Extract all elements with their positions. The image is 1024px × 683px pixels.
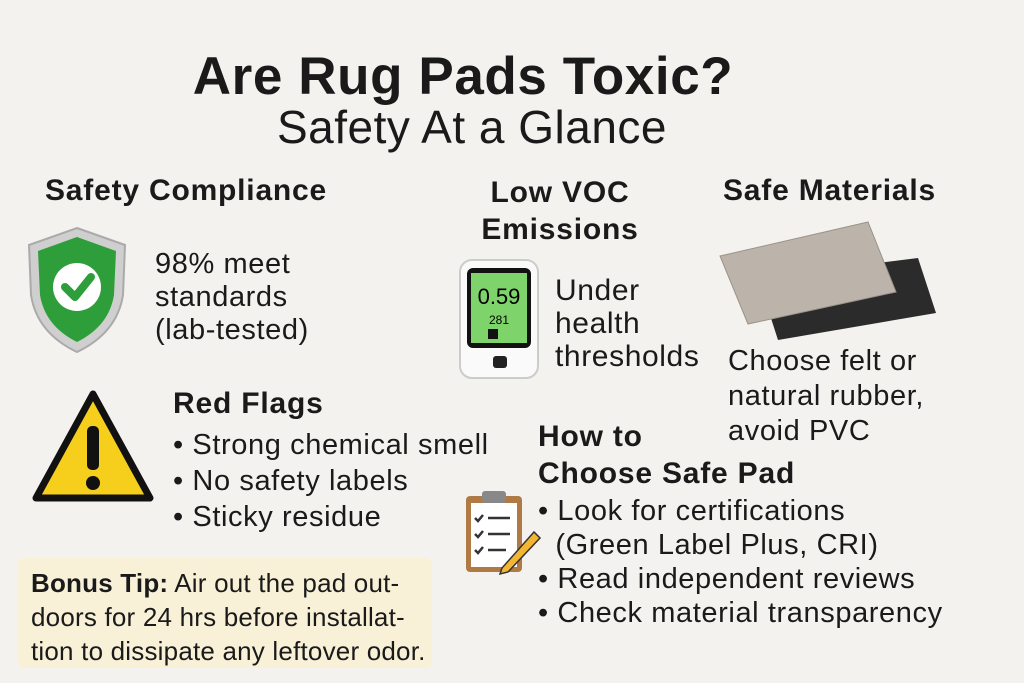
- text: under health thresholds: [555, 274, 699, 373]
- icon: VOC meter: 0.59: [478, 284, 520, 309]
- panel: safe materials: [719, 174, 936, 447]
- title: Are Rug Pads Toxic?: [193, 47, 733, 106]
- panel: safety compliance: [28, 174, 327, 353]
- icon: VOC meter: [459, 259, 539, 379]
- callout: bonus tip: [18, 558, 432, 668]
- text: under health thresholds: Under: [555, 274, 640, 307]
- text: 98% meet standards: (lab-tested): [155, 314, 309, 346]
- panel: red flags: [32, 387, 489, 533]
- callout: bonus tip: Bonus Tip: Air out the pad out-: [31, 568, 399, 598]
- text: choose felt: [728, 345, 924, 447]
- heading: low VOC: Emissions: [481, 213, 639, 246]
- heading: how to choose: Choose Safe Pad: [538, 457, 795, 490]
- text: choose felt: Choose felt or: [728, 345, 917, 377]
- text: under health thresholds: thresholds: [555, 340, 699, 373]
- icon: warning triangle: [32, 390, 154, 502]
- list: red flags: • No safety labels: [173, 465, 408, 497]
- subtitle: Safety At a Glance: [277, 101, 667, 153]
- heading: low VOC: [481, 176, 639, 246]
- list: red flags: [173, 429, 489, 533]
- heading: safe materials: Safe Materials: [723, 174, 936, 207]
- callout: bonus tip: doors for 24 hrs before installat-: [31, 602, 405, 632]
- list: red flags: • Sticky residue: [173, 501, 381, 533]
- panel: low VOC: [459, 176, 699, 379]
- icon: clipboard: [466, 491, 541, 575]
- list: how to choose: (Green Label Plus, CRI): [555, 529, 879, 561]
- text: choose felt: natural rubber,: [728, 380, 924, 412]
- icon: pad samples: [719, 221, 936, 340]
- heading: safety compliance: Safety Compliance: [45, 174, 327, 207]
- list: how to choose: [538, 495, 943, 629]
- icon: VOC meter: 281: [489, 313, 509, 327]
- heading: how to choose: How to: [538, 420, 643, 453]
- list: how to choose: • Look for certifications: [538, 495, 845, 527]
- list: how to choose: • Check material transparency: [538, 597, 943, 629]
- text: 98% meet standards: [155, 248, 309, 346]
- heading: red flags: Red Flags: [173, 387, 324, 420]
- callout: bonus tip: tion to dissipate any leftover odor.: [31, 636, 426, 666]
- text: under health thresholds: health: [555, 307, 640, 340]
- heading: how to choose: [538, 420, 795, 490]
- list: how to choose: • Read independent reviews: [538, 563, 915, 595]
- list: red flags: • Strong chemical smell: [173, 429, 489, 461]
- heading: low VOC: Low VOC: [491, 176, 629, 209]
- text: 98% meet standards: 98% meet: [155, 248, 290, 280]
- text: 98% meet standards: standards: [155, 281, 288, 313]
- icon: shield: [28, 227, 126, 353]
- panel: how to choose: [466, 420, 943, 629]
- text: choose felt: avoid PVC: [728, 415, 870, 447]
